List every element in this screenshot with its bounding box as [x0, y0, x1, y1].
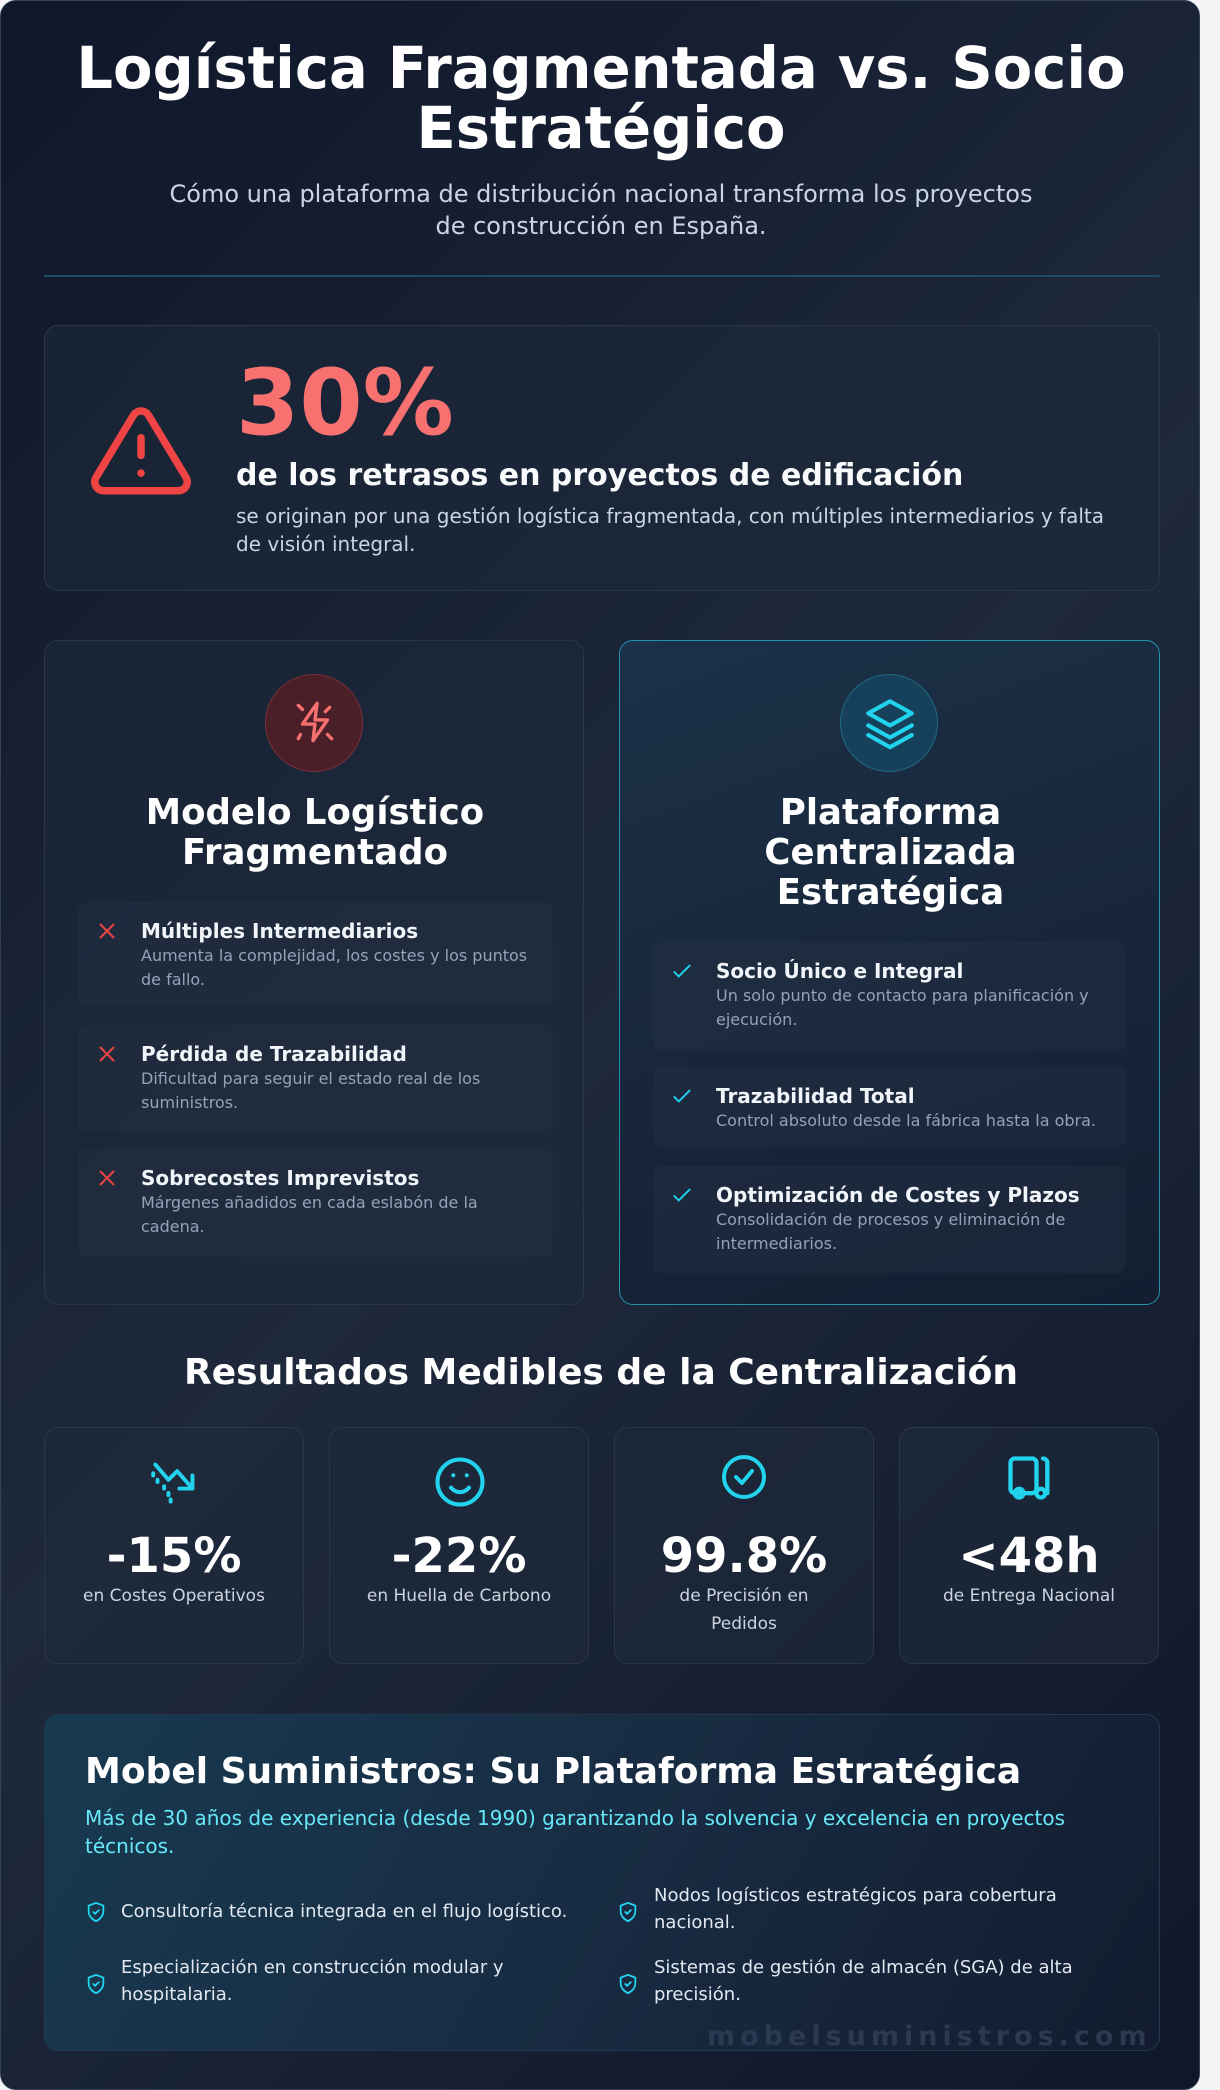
item: sobrecostes [78, 1149, 553, 1257]
list item 4: Sistemas de gestión de almacén (SGA) de alta precisión. [654, 1957, 1073, 2005]
heading: Estratégica [777, 872, 1004, 913]
item: sobrecostes: Sobrecostes Imprevistos [141, 1166, 419, 1190]
stat card: precision: 99.8% [661, 1528, 827, 1584]
stat heading: de los retrasos en proyectos de edificación [236, 458, 963, 493]
stat card: costs: -15% [107, 1528, 241, 1584]
stat card: precision [614, 1427, 874, 1664]
item: trazabilidad total: Trazabilidad Total [716, 1084, 915, 1108]
stat card: precision: Pedidos [711, 1614, 777, 1634]
list item 3: Especialización en construcción modular y hospitalaria. [121, 1957, 504, 2005]
stat card: carbon: en Huella de Carbono [367, 1586, 551, 1606]
tagline: Más de 30 años de experiencia (desde 1990) garantizando la solvencia y excelencia en proyectos técnicos. [85, 1806, 1065, 1858]
item: intermediarios: Múltiples Intermediarios [141, 919, 418, 943]
icon: check circle [722, 1455, 766, 1499]
heading: Plataforma [780, 792, 1001, 833]
stat card: delivery: <48h [958, 1528, 1100, 1584]
icon: truck [1008, 1456, 1050, 1500]
item: trazabilidad [78, 1025, 553, 1131]
panel: Mobel Suministros [44, 1714, 1160, 2051]
list item 1: Consultoría técnica integrada en el flujo logístico. [121, 1901, 567, 1922]
stat card: carbon [329, 1427, 589, 1664]
item: intermediarios: Aumenta la complejidad, los costes y los puntos de fallo. [141, 946, 527, 989]
stat card: delivery [899, 1427, 1159, 1664]
icon: smile [436, 1458, 484, 1506]
item: optimizacion: Optimización de Costes y Plazos [716, 1183, 1080, 1207]
watermark: mobelsuministros.com [707, 2021, 1152, 2052]
icon: warning [91, 407, 191, 494]
heading: Centralizada [764, 832, 1017, 873]
item: trazabilidad total [653, 1067, 1126, 1147]
panel: alert statistic [44, 325, 1160, 591]
heading: Fragmentado [182, 832, 448, 873]
icon: broken lightning [265, 674, 363, 772]
heading: Mobel Suministros: Su Plataforma Estratégica [85, 1751, 1021, 1792]
item: socio unico: Un solo punto de contacto para planificación y ejecución. [716, 986, 1089, 1029]
item: socio unico [653, 942, 1126, 1051]
icon: layers [840, 674, 938, 772]
big number: 30% [236, 351, 454, 456]
heading [146, 792, 484, 873]
subtitle: Cómo una plataforma de distribución nacional transforma los proyectos de construcción en España. [170, 180, 1032, 240]
title: Logística Fragmentada vs. Socio Estratégico [76, 35, 1126, 162]
icon: trend down [151, 1462, 194, 1504]
item: socio unico: Socio Único e Integral [716, 959, 963, 983]
item: optimizacion: Consolidación de procesos y eliminación de intermediarios. [716, 1210, 1065, 1253]
panel: centralized platform [619, 640, 1160, 1305]
item: sobrecostes: Márgenes añadidos en cada eslabón de la cadena. [141, 1193, 478, 1236]
item: trazabilidad: Pérdida de Trazabilidad [141, 1042, 407, 1066]
panel: fragmented model [44, 640, 584, 1305]
stat card: costs [44, 1427, 304, 1664]
stat card: precision: de Precisión en [679, 1586, 809, 1606]
stat description: se originan por una gestión logística fragmentada, con múltiples intermediarios y falta de visión integral. [236, 504, 1104, 556]
section heading: results: Resultados Medibles de la Centralización [184, 1352, 1018, 1393]
heading [764, 792, 1017, 913]
stat card: costs: en Costes Operativos [83, 1586, 265, 1606]
item: intermediarios [78, 902, 553, 1006]
stat card: delivery: de Entrega Nacional [943, 1586, 1115, 1606]
item: trazabilidad total: Control absoluto desde la fábrica hasta la obra. [716, 1111, 1096, 1130]
stat card: carbon: -22% [392, 1528, 526, 1584]
item: optimizacion [653, 1166, 1126, 1273]
item: trazabilidad: Dificultad para seguir el estado real de los suministros. [141, 1069, 480, 1112]
heading: Modelo Logístico [146, 792, 484, 833]
list item 2: Nodos logísticos estratégicos para cobertura nacional. [654, 1885, 1057, 1933]
